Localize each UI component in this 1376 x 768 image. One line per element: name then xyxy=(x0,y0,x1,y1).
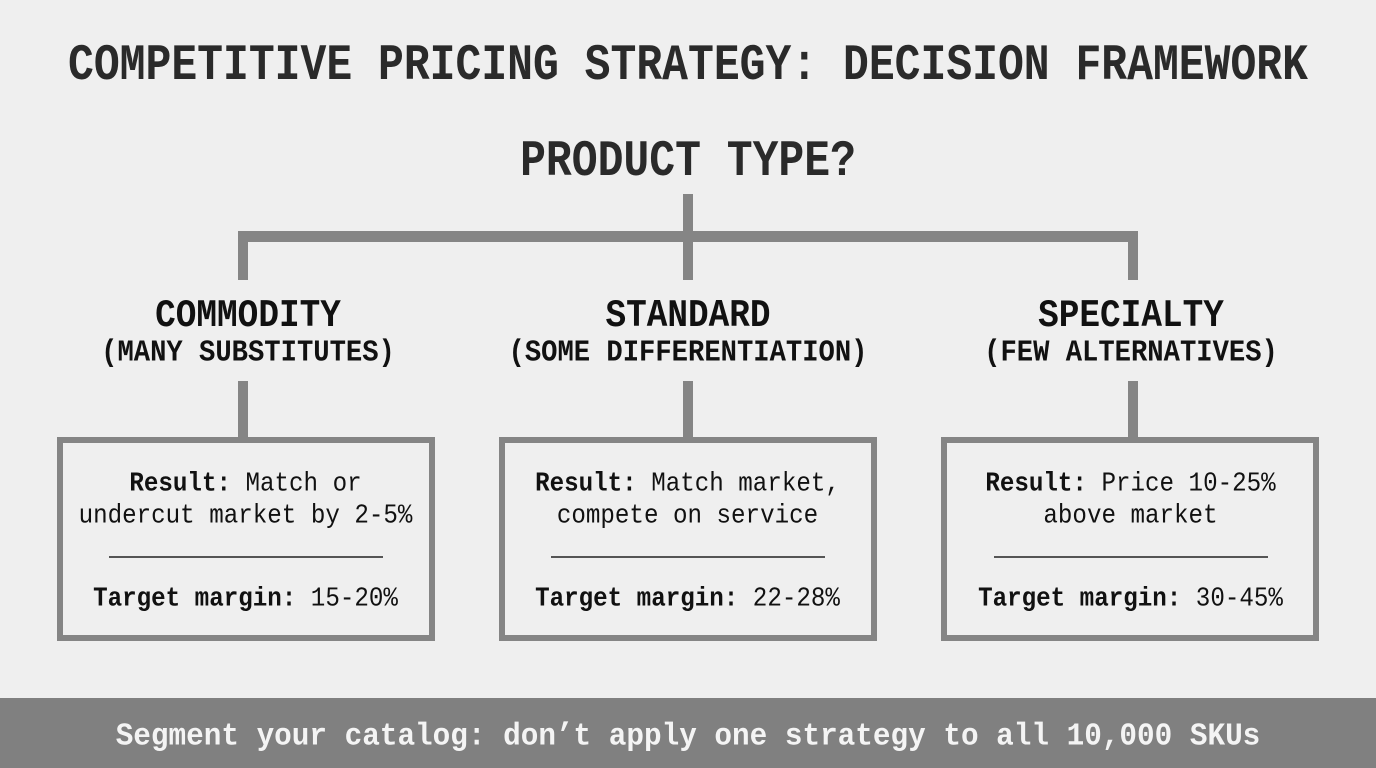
result text line two: compete on service xyxy=(557,502,818,531)
heading: commodity: COMMODITY xyxy=(155,295,341,338)
connector: commodity to result box xyxy=(238,381,248,438)
connector: standard to result box xyxy=(683,381,693,438)
panel: specialty result xyxy=(941,437,1319,641)
target margin: Target margin: 22-28% xyxy=(535,585,840,614)
result text: Result: Match market, xyxy=(535,469,840,499)
panel: standard result xyxy=(499,437,877,641)
target margin: Target margin: 30-45% xyxy=(978,585,1283,614)
title: COMPETITIVE PRICING STRATEGY: DECISION FRAMEWORK xyxy=(68,37,1308,94)
connector tree from question to the three product types xyxy=(238,194,1138,280)
result text line two: undercut market by 2-5% xyxy=(79,502,412,531)
subheading: many substitutes: (MANY SUBSTITUTES) xyxy=(101,336,395,371)
connector: specialty to result box xyxy=(1128,381,1138,438)
subheading: some differentiation: (SOME DIFFERENTIATION) xyxy=(509,336,867,371)
target margin: Target margin: 15-20% xyxy=(93,585,398,614)
heading: specialty: SPECIALTY xyxy=(1038,295,1224,338)
decision question heading: PRODUCT TYPE? xyxy=(520,132,856,190)
footer takeaway text: Segment your catalog: don’t apply one strategy to all 10,000 SKUs xyxy=(116,719,1260,754)
heading: standard: STANDARD xyxy=(605,295,771,338)
subheading: few alternatives: (FEW ALTERNATIVES) xyxy=(984,336,1278,371)
result text: Result: Match or xyxy=(129,469,362,499)
footer banner xyxy=(0,698,1376,768)
result text line two: above market xyxy=(1043,502,1218,531)
panel: commodity result xyxy=(57,437,435,641)
result text: Result: Price 10-25% xyxy=(985,469,1276,499)
